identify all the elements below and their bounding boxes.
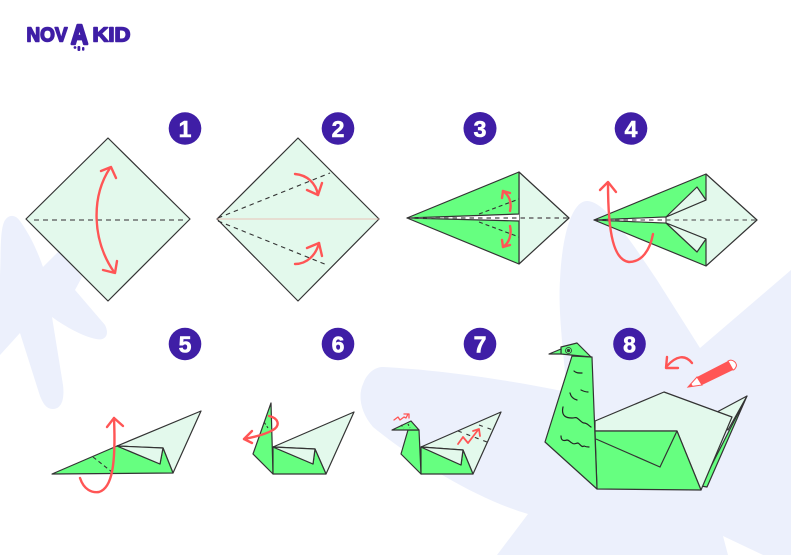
number badge 7 — [464, 328, 496, 360]
step 2: folds to the center line — [217, 138, 379, 301]
head — [561, 343, 591, 357]
feather marks — [561, 371, 591, 447]
number badge 4: 4 — [625, 116, 638, 142]
number badge 7: 7 — [474, 332, 486, 358]
body light wing — [595, 392, 732, 490]
number badge 2: 2 — [332, 116, 344, 142]
body green — [595, 431, 701, 490]
tail strip — [701, 396, 747, 487]
icon: pencil — [688, 360, 736, 387]
number badge 5 — [169, 328, 201, 360]
background blob: left star — [0, 216, 107, 409]
step 6: neck folded up — [244, 403, 354, 474]
number badge 3 — [464, 112, 496, 145]
number badge 8: 8 — [623, 332, 636, 358]
eye — [566, 348, 572, 354]
step 8: finished swan — [545, 343, 747, 490]
logo: Novakid: KID — [92, 24, 130, 46]
background blob: large shape — [360, 201, 791, 555]
step 4: kite with flaps — [594, 174, 757, 266]
step 3: kite with folded sides — [407, 172, 569, 264]
number badge 3: 3 — [474, 116, 486, 142]
logo: Novakid: NOV — [26, 24, 68, 46]
number badge 5: 5 — [179, 332, 192, 358]
neck — [545, 356, 597, 489]
logo: Novakid — [26, 19, 130, 51]
number badge 1 — [169, 112, 201, 145]
number badge 2 — [322, 112, 354, 145]
number badge 1: 1 — [179, 116, 192, 142]
beak — [549, 349, 561, 354]
step 5: folded in half — [52, 411, 201, 492]
step 7: head fold and zigzag marks — [392, 412, 501, 474]
number badge 4 — [615, 112, 647, 145]
number badge 8 — [613, 328, 646, 360]
number badge 6: 6 — [332, 332, 344, 358]
fold line — [596, 431, 677, 467]
curved arrow near pencil — [666, 357, 692, 368]
step 1: square with center fold — [26, 138, 190, 301]
logo: Novakid: A — [71, 19, 88, 50]
tail back — [717, 396, 747, 430]
number badge 6 — [322, 328, 354, 360]
